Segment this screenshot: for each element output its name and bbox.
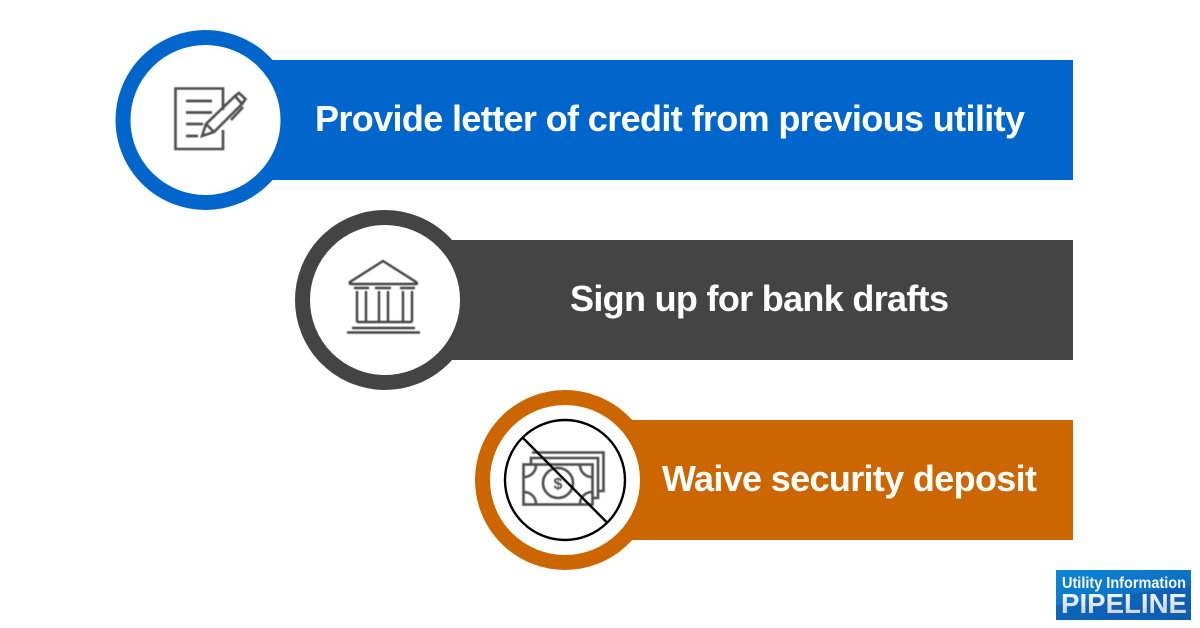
label: security deposit: Waive security deposit <box>662 458 1037 499</box>
icon: document and pen <box>176 88 246 149</box>
ring: bank drafts <box>302 218 468 382</box>
bar: security deposit <box>625 420 1073 540</box>
bar: letter of credit <box>265 60 1073 180</box>
panel: security deposit <box>482 398 1073 562</box>
icon: prohibition sign <box>505 420 625 540</box>
ring: letter of credit <box>123 38 288 202</box>
icon: money stack <box>524 452 604 504</box>
logo: Utility Information Pipeline <box>1056 570 1191 620</box>
bar: bank drafts <box>445 240 1073 360</box>
label: bank drafts: Sign up for bank drafts <box>570 278 949 319</box>
logo: Utility Information Pipeline: PIPELINE <box>1061 588 1187 619</box>
ring: security deposit <box>482 398 648 562</box>
icon: money stack: $ <box>554 476 563 493</box>
panel: bank drafts <box>302 218 1073 382</box>
icon: bank building <box>347 261 420 332</box>
label: letter of credit: Provide letter of credit from previous utility <box>315 98 1025 139</box>
logo: Utility Information Pipeline: Utility Information <box>1062 575 1186 592</box>
panel: letter of credit <box>123 38 1073 202</box>
